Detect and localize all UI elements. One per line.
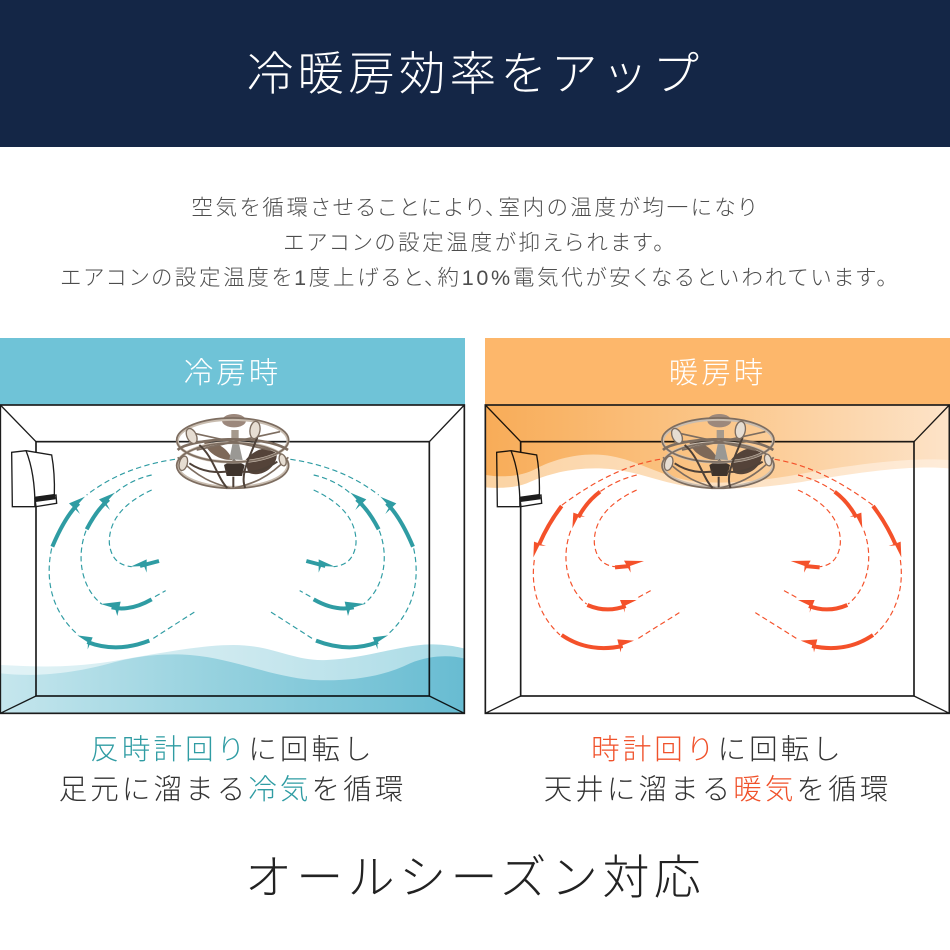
intro text: エアコンの設定温度を1度上げると、約10%電気代が安くなるといわれています。	[60, 266, 890, 290]
warm air waves	[486, 406, 949, 489]
caption: cooling	[59, 734, 406, 806]
panel: heating room	[485, 405, 949, 713]
title: 冷暖房効率をアップ	[247, 48, 703, 100]
heading: cooling: 冷房時	[184, 357, 281, 390]
heading: heating: 暖房時	[669, 357, 766, 390]
panel header: cooling	[0, 338, 465, 405]
air conditioner	[497, 451, 542, 507]
cold air waves	[1, 644, 464, 713]
airflow arrows: right	[270, 459, 416, 649]
panel: cooling room	[0, 405, 464, 713]
caption: heating: 時計回りに回転し	[591, 734, 844, 766]
airflow arrows: right	[755, 459, 901, 652]
intro text: エアコンの設定温度が抑えられます。	[284, 231, 666, 255]
room outline	[0, 405, 464, 713]
airflow arrows: left	[49, 459, 195, 649]
footer heading: オールシーズン対応	[245, 851, 705, 904]
room outline	[485, 405, 949, 713]
intro text	[60, 196, 890, 290]
title band	[0, 0, 950, 147]
intro text: 空気を循環させることにより、室内の温度が均一になり	[191, 196, 759, 220]
caption: heating: 天井に溜まる暖気を循環	[544, 774, 891, 806]
airflow arrows: left	[533, 459, 679, 652]
ceiling fan	[662, 414, 774, 488]
caption: cooling: 反時計回りに回転し	[90, 734, 375, 766]
air conditioner	[12, 451, 57, 507]
caption: cooling: 足元に溜まる冷気を循環	[59, 774, 406, 806]
panel header: heating	[485, 338, 950, 405]
caption: heating	[544, 734, 891, 806]
ceiling fan	[177, 414, 289, 488]
